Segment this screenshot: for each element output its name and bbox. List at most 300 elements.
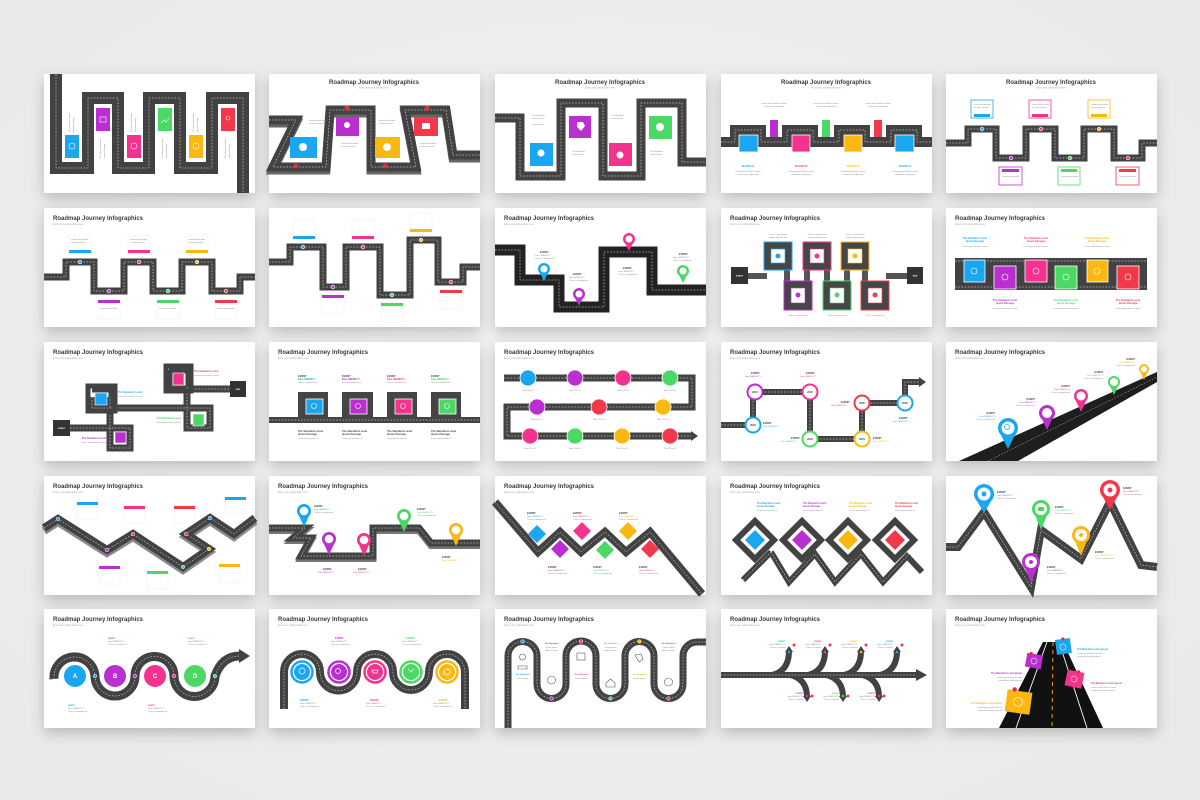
slide 1: vertical serpentine road: The Standard Lorem — [99, 139, 102, 158]
slide 13: three-lane step road with circles: Step Title 04 — [664, 389, 677, 392]
slide 25: perspective road with sticky notes: Lorem ipsum dolor sit amet — [1091, 686, 1116, 689]
slide 3: square wave road with squares: Lorem ipsum — [532, 123, 544, 126]
slide 3: square wave road with squares: Roadmap Journey Infographics — [555, 80, 646, 86]
slide 18: zigzag road with diamonds: EVENT — [593, 565, 602, 569]
slide 17: folded road with pins: EVENT — [358, 567, 367, 571]
slide 22: serpentine road with icon circles: Date: MM/DD/YY — [300, 702, 317, 705]
slide 10: road band with alternating squares: Ipsum Passage — [996, 302, 1015, 305]
slide 22: serpentine road with icon circles: Date: MM/DD/YY — [331, 640, 348, 643]
slide 25: perspective road with sticky notes — [946, 609, 1157, 728]
slide 22: serpentine road with icon circles — [269, 609, 480, 728]
slide 13: three-lane step road with circles: Step Title 03 — [617, 389, 630, 392]
slide 24: arrow road with branches: This is a sample — [788, 699, 804, 701]
slide 10: road band with alternating squares: Lorem ipsum dolor sit amet — [1053, 307, 1079, 310]
slide 5: wave road with phase cards: Enter your subheadline here — [1036, 86, 1067, 90]
slide 10: road band with alternating squares: Ipsum Passage — [1057, 302, 1076, 305]
slide 8: black road with map pins: This is a sample text — [618, 273, 637, 276]
slide 8: black road with map pins: Roadmap Journey Infographics — [504, 216, 595, 222]
slide 4: phase road: consectetur adipiscing — [738, 173, 759, 176]
slide 19: diamond loops: The Standard Lorem — [895, 502, 918, 505]
slide 6: wave road with cards: Lorem ipsum dolor — [100, 307, 118, 310]
slide 22: serpentine road with icon circles: This is a sample text — [433, 705, 452, 708]
slide 11: start to end crossroads: The Standard Lorem — [118, 391, 143, 394]
slide 23: vertical wave road with outline icons: The Standard — [545, 642, 559, 645]
slide 24: arrow road with branches: EVENT — [796, 693, 804, 695]
slide 10: road band with alternating squares: The Standard Lorem — [963, 237, 988, 240]
slide 20: mountain road with pins: This is a sample text — [997, 497, 1016, 500]
slide 8: black road with map pins: Enter your subheadline here — [504, 223, 535, 226]
slide 19: diamond loops: Lorem ipsum dolor sit — [895, 509, 915, 512]
slide 20: mountain road with pins: EVENT — [1047, 565, 1056, 569]
slide 2: 3D zigzag road with pins — [269, 74, 480, 193]
slide 6: wave road with cards: sit amet consect — [130, 241, 145, 244]
slide 8: black road with map pins: Date: MM/DD/YY — [535, 254, 552, 257]
slide 12: straight road with framed squares: This is a sample text — [298, 381, 317, 384]
slide 1: vertical serpentine road: Ipsum Passage — [166, 143, 168, 158]
slide 18: zigzag road with diamonds: This is a sample text — [548, 572, 567, 575]
slide 2: 3D zigzag road with pins: Lorem ipsum dolor — [341, 142, 359, 145]
slide 19: diamond loops: The Standard Lorem — [757, 502, 780, 505]
slide 14: year timeline road: 2020 — [750, 423, 756, 427]
slide 13: three-lane step road with circles: Step Title 02 — [569, 389, 582, 392]
slide 23: vertical wave road with outline icons: Lorem ipsum — [662, 646, 675, 649]
slide 12: straight road with framed squares: Lorem ipsum dolor sit — [387, 437, 407, 440]
slide 10: road band with alternating squares: Ipsum Passage — [966, 240, 985, 243]
slide 22: serpentine road with icon circles: EVENT — [370, 698, 379, 702]
slide 21: wavy road with A B C D circles: D — [193, 674, 198, 680]
slide 3: square wave road with squares: The Standard — [650, 150, 663, 153]
slide 20: mountain road with pins: EVENT — [1095, 550, 1104, 554]
slide 21: wavy road with A B C D circles: Enter your subheadline here — [53, 624, 84, 627]
slide 20: mountain road with pins: Date: MM/DD/YY — [1047, 569, 1064, 572]
slide 6: wave road with cards: Lorem ipsum dolor — [71, 238, 89, 241]
slide 14: year timeline road: Date: MM/DD/YY — [763, 425, 780, 428]
slide 19: diamond loops: Ipsum Passage — [849, 505, 867, 508]
slide 14: year timeline road: 2024 — [859, 437, 865, 441]
slide 11: start to end crossroads: Lorem ipsum dolor sit amet — [194, 374, 219, 377]
slide 13: three-lane step road with circles: Step Title 05 — [657, 418, 670, 421]
slide 13: three-lane step road with circles — [495, 342, 706, 461]
slide 9: start/end with looped squares: Enter your subheadline here — [730, 223, 761, 226]
slide 19: diamond loops: Ipsum Passage — [803, 505, 821, 508]
slide 6: wave road with cards: Lorem ipsum dolor — [188, 238, 206, 241]
slide 11: start to end crossroads: Roadmap Journey Infographics — [53, 350, 144, 356]
slide 3: square wave road with squares: Lorem Ipsum — [650, 153, 662, 156]
slide 23: vertical wave road with outline icons: Enter your subheadline here — [504, 624, 535, 627]
slide 13: three-lane step road with circles: Roadmap Journey Infographics — [504, 350, 595, 356]
slide 24: arrow road with branches: Date: MM/DD/YY — [859, 695, 876, 698]
slide 14: year timeline road: Date: MM/DD/YY — [873, 440, 890, 443]
slide 4: phase road: consectetur adipiscing — [764, 105, 785, 108]
slide 1: vertical serpentine road: Ipsum Passage — [229, 143, 231, 158]
slide 10: road band with alternating squares: Ipsum Passage — [1088, 240, 1107, 243]
slide 22: serpentine road with icon circles: Roadmap Journey Infographics — [278, 617, 369, 623]
slide 4: phase road: Lorem ipsum dolor sit amet — [813, 102, 839, 105]
slide 10: road band with alternating squares: The Standard Lorem — [1054, 299, 1079, 302]
slide 19: diamond loops: Enter your subheadline here — [730, 491, 761, 494]
slide 23: vertical wave road with outline icons: The Standard — [604, 642, 618, 645]
slide 22: serpentine road with icon circles: This is a sample text — [300, 705, 319, 708]
slide 25: perspective road with sticky notes: The Standard Lorem Ipsum — [1091, 682, 1122, 685]
slide 15: diagonal road with growing pins: This is a sample text — [1016, 404, 1035, 407]
slide 15: diagonal road with growing pins: Date: MM/DD/YY — [1054, 388, 1071, 391]
slide 1: vertical serpentine road: Ipsum Passage — [73, 117, 75, 132]
slide 5: wave road with phase cards: Lorem ipsum dolor — [974, 103, 992, 106]
slide 14: year timeline road: 2025 — [859, 401, 865, 405]
slide 9: start/end with looped squares: simply add your text — [846, 236, 865, 239]
slide 20: mountain road with pins: EVENT — [1123, 486, 1132, 490]
slide 19: diamond loops: Lorem ipsum dolor sit — [803, 509, 823, 512]
slide 4: phase road — [721, 74, 932, 193]
slide 14: year timeline road: EVENT — [899, 416, 908, 420]
slide 8: black road with map pins: EVENT — [679, 252, 688, 256]
slide 9: start/end with looped squares: This is a sample text — [789, 314, 808, 317]
slide 14: year timeline road: EVENT — [806, 371, 815, 375]
slide 11: start to end crossroads: The Standard Lorem — [82, 437, 107, 440]
slide 24: arrow road with branches: EVENT — [814, 641, 822, 643]
slide 24: arrow road with branches: Enter your subheadline here — [730, 624, 761, 627]
slide 20: mountain road with pins: Date: MM/DD/YY — [1123, 490, 1140, 493]
slide 5: wave road with phase cards: Roadmap Journey Infographics — [1006, 80, 1097, 86]
slide 14: year timeline road: EVENT — [841, 400, 850, 404]
slide 21: wavy road with A B C D circles: This is a sample text — [108, 643, 127, 646]
slide 11: start to end crossroads: START — [58, 427, 66, 430]
slide 14: year timeline road: Date: MM/DD/YY — [745, 375, 762, 378]
slide 12: straight road with framed squares: Roadmap Journey Infographics — [278, 350, 369, 356]
slide 18: zigzag road with diamonds: This is a sample text — [619, 518, 638, 521]
slide 5: wave road with phase cards: sit amet consect — [1032, 106, 1047, 109]
slide 20: mountain road with pins: Date: MM/DD/YY — [1095, 554, 1112, 557]
slide 14: year timeline road: Roadmap Journey Infographics — [730, 350, 821, 356]
slide 9: start/end with looped squares: simply add your text — [769, 236, 788, 239]
slide 20: mountain road with pins: This is a sample text — [1047, 572, 1066, 575]
slide 9: start/end with looped squares: simply add your text — [808, 236, 827, 239]
slide 19: diamond loops: Roadmap Journey Infographics — [730, 484, 821, 490]
slide 5: wave road with phase cards: Lorem ipsum dolor — [1032, 103, 1050, 106]
slide 23: vertical wave road with outline icons: Lorem ipsum — [633, 677, 646, 680]
slide 12: straight road with framed squares: This is a sample text — [387, 381, 406, 384]
slide 8: black road with map pins: EVENT — [623, 266, 632, 270]
slide 22: serpentine road with icon circles: This is a sample text — [331, 643, 350, 646]
slide 24: arrow road with branches: Roadmap Journey Infographics — [730, 617, 821, 623]
slide 12: straight road with framed squares: The Standard Lorem — [298, 429, 324, 433]
slide 4: phase road: Roadmap Journey Infographics — [781, 80, 872, 86]
slide 21: wavy road with A B C D circles: This is a sample text — [68, 710, 87, 713]
slide 18: zigzag road with diamonds: EVENT — [527, 511, 536, 515]
slide 24: arrow road with branches: Date: MM/DD/YY — [787, 695, 804, 698]
slide 10: road band with alternating squares: The Standard Lorem — [1085, 237, 1110, 240]
slide 10: road band with alternating squares: Lorem ipsum dolor sit amet — [1084, 245, 1110, 248]
slide 21: wavy road with A B C D circles: Date: MM/DD/YY — [68, 707, 85, 710]
slide 6: wave road with cards: Roadmap Journey Infographics — [53, 216, 144, 222]
slide 1: vertical serpentine road: Ipsum Passage — [135, 117, 137, 132]
slide 10: road band with alternating squares: Ipsum Passage — [1119, 302, 1138, 305]
slide 21: wavy road with A B C D circles: This is a sample text — [148, 710, 167, 713]
slide 14: year timeline road: EVENT — [763, 421, 772, 425]
slide 23: vertical wave road with outline icons: dolor sit amet — [604, 649, 617, 652]
slide 9: start/end with looped squares: Roadmap Journey Infographics — [730, 216, 821, 222]
slide 19: diamond loops: Lorem ipsum dolor sit — [849, 509, 869, 512]
slide 14: year timeline road: Date: MM/DD/YY — [800, 375, 817, 378]
slide 24: arrow road with branches: This is a sample — [770, 647, 786, 649]
slide 21: wavy road with A B C D circles: B — [113, 674, 118, 680]
slide 14: year timeline road: EVENT — [791, 436, 800, 440]
slide 12: straight road with framed squares: The Standard Lorem — [431, 429, 457, 433]
slide 9: start/end with looped squares — [721, 208, 932, 327]
slide 21: wavy road with A B C D circles: EVENT — [68, 705, 76, 707]
slide 9: start/end with looped squares: This is a sample text — [828, 314, 847, 317]
slide 25: perspective road with sticky notes: Roadmap Journey Infographics — [955, 617, 1046, 623]
slide 21: wavy road with A B C D circles: C — [153, 674, 158, 680]
slide 11: start to end crossroads: Enter your subheadline here — [53, 357, 84, 360]
slide 22: serpentine road with icon circles: This is a sample text — [402, 643, 421, 646]
slide 1: vertical serpentine road: The Standard Lorem — [224, 139, 227, 158]
slide 24: arrow road with branches: Date: MM/DD/YY — [877, 643, 894, 646]
slide 17: folded road with pins: This is a sample text — [314, 511, 333, 514]
slide 8: black road with map pins: Date: MM/DD/YY — [569, 276, 586, 279]
slide 23: vertical wave road with outline icons: dolor sit amet — [545, 649, 558, 652]
slide 6: wave road with cards: Lorem ipsum dolor — [159, 307, 177, 310]
slide 24: arrow road with branches: EVENT — [850, 641, 858, 643]
slide 25: perspective road with sticky notes: Lorem ipsum dolor sit amet — [977, 706, 1002, 709]
slide 23: vertical wave road with outline icons: The Standard — [516, 673, 530, 676]
slide 4: phase road: consectetur adipiscing — [791, 173, 812, 176]
slide 17: folded road with pins: EVENT — [314, 504, 323, 508]
slide 10: road band with alternating squares: The Standard Lorem — [993, 299, 1018, 302]
slide 22: serpentine road with icon circles: Date: MM/DD/YY — [433, 702, 450, 705]
slide 3: square wave road with squares: Lorem Ipsum — [532, 117, 544, 120]
slide 12: straight road with framed squares: This is a sample text — [431, 381, 450, 384]
slide 18: zigzag road with diamonds: EVENT — [619, 511, 628, 515]
slide 12: straight road with framed squares: Ipsum Passage — [387, 432, 406, 436]
slide 15: diagonal road with growing pins: EVENT — [1126, 357, 1135, 361]
slide 14: year timeline road: 2023 — [807, 437, 813, 441]
slide 12: straight road with framed squares: The Standard Lorem — [387, 429, 413, 433]
slide 24: arrow road with branches: This is a sample — [860, 699, 876, 701]
slide 12: straight road with framed squares: Date: MM/DD/YY — [387, 378, 405, 381]
slide 11: start to end crossroads: Lorem ipsum dolor sit amet — [156, 421, 181, 424]
slide 10: road band with alternating squares: Lorem ipsum dolor sit amet — [962, 245, 988, 248]
slide 2: 3D zigzag road with pins: sit amet consect — [419, 145, 434, 148]
slide 24: arrow road with branches: Date: MM/DD/YY — [769, 643, 786, 646]
slide 17: folded road with pins: This is a sample text — [417, 514, 436, 517]
slide 3: square wave road with squares: The Standard — [611, 114, 624, 117]
slide 13: three-lane step road with circles: Step Title 08 — [664, 447, 677, 450]
slide 21: wavy road with A B C D circles: EVENT — [108, 638, 116, 640]
slide 3: square wave road with squares — [495, 74, 706, 193]
slide 19: diamond loops: Ipsum Passage — [757, 505, 775, 508]
slide 8: black road with map pins: EVENT — [540, 250, 549, 254]
slide 9: start/end with looped squares: START — [736, 274, 744, 278]
slide 4: phase road: PHASE 02 — [795, 164, 808, 168]
slide 24: arrow road with branches: Date: MM/DD/YY — [805, 643, 822, 646]
slide 5: wave road with phase cards: sit amet consect — [974, 106, 989, 109]
slide 13: three-lane step road with circles: Step Title 01 — [522, 389, 535, 392]
slide 25: perspective road with sticky notes: Lorem ipsum dolor sit amet — [1077, 652, 1102, 655]
slide 15: diagonal road with growing pins: EVENT — [1094, 370, 1103, 374]
slide 11: start to end crossroads: Lorem ipsum dolor sit amet — [118, 395, 143, 398]
slide 23: vertical wave road with outline icons: Lorem ipsum — [575, 677, 587, 680]
slide 3: square wave road with squares: Lorem Ipsum — [572, 153, 584, 156]
slide 1: vertical serpentine road: The Standard Lorem — [68, 113, 71, 132]
slide 12: straight road with framed squares: Ipsum Passage — [342, 432, 361, 436]
slide 17: folded road with pins: Date: MM/DD/YY — [314, 508, 331, 511]
slide 4: phase road: Lorem ipsum dolor sit amet — [761, 102, 787, 105]
slide 24: arrow road with branches: This is a sample — [842, 647, 858, 649]
slide 11: start to end crossroads: The Standard Lorem — [157, 417, 182, 420]
slide 13: three-lane step road with circles: Step Title 09 — [616, 447, 629, 450]
slide 18: zigzag road with diamonds: Enter your subheadline here — [504, 491, 535, 494]
slide 10: road band with alternating squares: Lorem ipsum dolor sit amet — [1023, 245, 1049, 248]
slide 19: diamond loops: The Standard Lorem — [849, 502, 872, 505]
slide 10: road band with alternating squares: Roadmap Journey Infographics — [955, 216, 1046, 222]
slide 14: year timeline road: Enter your subheadline here — [730, 357, 761, 360]
slide 24: arrow road with branches: EVENT — [886, 641, 894, 643]
slide 22: serpentine road with icon circles: EVENT — [300, 698, 309, 702]
slide 9: start/end with looped squares: This is a sample text — [808, 233, 827, 236]
slide 24: arrow road with branches: Date: MM/DD/YY — [823, 695, 840, 698]
slide 1: vertical serpentine road: The Standard Lorem — [130, 113, 133, 132]
slide 8: black road with map pins: This is a sample text — [673, 259, 692, 262]
slide 15: diagonal road with growing pins: Roadmap Journey Infographics — [955, 350, 1046, 356]
slide 8: black road with map pins — [495, 208, 706, 327]
slide 25: perspective road with sticky notes: consectetur adipiscing elit — [1077, 655, 1101, 658]
slide 25: perspective road with sticky notes: consectetur adipiscing elit — [978, 709, 1002, 712]
slide 21: wavy road with A B C D circles: Date: MM/DD/YY — [148, 707, 165, 710]
slide 15: diagonal road with growing pins: EVENT — [986, 411, 995, 415]
slide 6: wave road with cards: sit amet consect — [188, 241, 203, 244]
slide 9: start/end with looped squares: This is a sample text — [866, 314, 885, 317]
slide 24: arrow road with branches: This is a sample — [824, 699, 840, 701]
slide 18: zigzag road with diamonds: Date: MM/DD/YY — [639, 569, 656, 572]
slide 21: wavy road with A B C D circles: Date: MM/DD/YY — [188, 640, 205, 643]
slide 18: zigzag road with diamonds: Roadmap Journey Infographics — [504, 484, 595, 490]
slide 4: phase road: PHASE 04 — [899, 164, 912, 168]
slide 17: folded road with pins: Date: MM/DD/YY — [442, 559, 459, 562]
slide 12: straight road with framed squares: EVENT — [298, 374, 307, 378]
slide 13: three-lane step road with circles: Enter your subheadline here — [504, 357, 535, 360]
slide 14: year timeline road: 2021 — [752, 390, 758, 394]
slide 22: serpentine road with icon circles: Date: MM/DD/YY — [402, 640, 419, 643]
slide 15: diagonal road with growing pins: Date: MM/DD/YY — [1119, 361, 1136, 364]
slide 4: phase road: consectetur adipiscing — [868, 105, 889, 108]
slide 22: serpentine road with icon circles: EVENT — [335, 636, 344, 640]
slide 10: road band with alternating squares: Lorem ipsum dolor sit amet — [1115, 307, 1141, 310]
slide 23: vertical wave road with outline icons: The Standard — [662, 642, 676, 645]
slide 20: mountain road with pins: EVENT — [997, 490, 1006, 494]
slide 1: vertical serpentine road — [44, 74, 255, 193]
slide 23: vertical wave road with outline icons: dolor sit amet — [662, 649, 675, 652]
slide 23: vertical wave road with outline icons: The Standard — [633, 673, 647, 676]
slide 12: straight road with framed squares: EVENT — [431, 374, 440, 378]
slide 24: arrow road with branches — [721, 609, 932, 728]
slide 1: vertical serpentine road: The Standard Lorem — [192, 113, 195, 132]
slide 18: zigzag road with diamonds: EVENT — [548, 565, 557, 569]
slide 24: arrow road with branches: EVENT — [778, 641, 786, 643]
slide 22: serpentine road with icon circles: Enter your subheadline here — [278, 624, 309, 627]
slide 2: 3D zigzag road with pins: Lorem ipsum dolor — [419, 142, 437, 145]
slide 18: zigzag road with diamonds: Date: MM/DD/YY — [619, 515, 636, 518]
slide 20: mountain road with pins: Date: MM/DD/YY — [1055, 509, 1072, 512]
slide 16: 3D zigzag road with phase cards: Enter your subheadline here — [53, 491, 84, 494]
slide 20: mountain road with pins: This is a sample text — [1123, 493, 1142, 496]
slide 4: phase road: Lorem ipsum dolor sit amet — [735, 170, 761, 173]
slide 3: square wave road with squares: The Standard — [532, 114, 545, 117]
slide 20: mountain road with pins: EVENT — [1055, 505, 1064, 509]
slide 21: wavy road with A B C D circles: Roadmap Journey Infographics — [53, 617, 144, 623]
slide 5: wave road with phase cards: sit amet consect — [1091, 106, 1106, 109]
slide 15: diagonal road with growing pins: Date: MM/DD/YY — [1019, 401, 1036, 404]
slide 20: mountain road with pins — [946, 476, 1157, 595]
slide 18: zigzag road with diamonds: Date: MM/DD/YY — [527, 515, 544, 518]
slide 14: year timeline road: EVENT — [751, 371, 760, 375]
slide 23: vertical wave road with outline icons: Lorem ipsum — [516, 677, 529, 680]
slide 2: 3D zigzag road with pins: Lorem ipsum dolor — [309, 119, 327, 122]
slide 4: phase road: PHASE 03 — [847, 164, 860, 168]
slide 23: vertical wave road with outline icons: The Standard — [574, 673, 589, 676]
slide 2: 3D zigzag road with pins: Lorem ipsum dolor — [378, 119, 396, 122]
slide 10: road band with alternating squares: The Standard Lorem — [1024, 237, 1049, 240]
slide 13: three-lane step road with circles: Step Title 07 — [531, 418, 544, 421]
slide 23: vertical wave road with outline icons: Roadmap Journey Infographics — [504, 617, 595, 623]
slide 9: start/end with looped squares: This is a sample text — [769, 233, 788, 236]
slide 25: perspective road with sticky notes: The Standard Lorem Ipsum — [971, 702, 1002, 705]
slide 16: 3D zigzag road with phase cards: Roadmap Journey Infographics — [53, 484, 144, 490]
slide 20: mountain road with pins: This is a sample text — [1055, 512, 1074, 515]
slide 4: phase road: Lorem ipsum dolor sit amet — [892, 170, 918, 173]
slide 25: perspective road with sticky notes: consectetur adipiscing elit — [1091, 689, 1115, 692]
slide 22: serpentine road with icon circles: Date: MM/DD/YY — [366, 702, 383, 705]
slide 25: perspective road with sticky notes: Enter your subheadline here — [955, 624, 986, 627]
slide 18: zigzag road with diamonds: This is a sample text — [593, 572, 612, 575]
slide 12: straight road with framed squares: This is a sample text — [342, 381, 361, 384]
slide 24: arrow road with branches: Date: MM/DD/YY — [841, 643, 858, 646]
slide 17: folded road with pins: EVENT — [442, 555, 451, 559]
slide 25: perspective road with sticky notes: Lorem ipsum dolor sit amet — [997, 676, 1022, 679]
slide 17: folded road with pins: EVENT — [323, 567, 332, 571]
slide 23: vertical wave road with outline icons — [495, 609, 706, 728]
slide 13: three-lane step road with circles: Step Title 06 — [593, 418, 606, 421]
slide 6: wave road with cards: Lorem ipsum dolor — [130, 238, 148, 241]
slide 20: mountain road with pins: Date: MM/DD/YY — [997, 494, 1014, 497]
slide 14: year timeline road: Date: MM/DD/YY — [831, 404, 848, 407]
slide 14: year timeline road: EVENT — [873, 436, 882, 440]
slide 12: straight road with framed squares: Lorem ipsum dolor sit — [298, 437, 318, 440]
slide 17: folded road with pins: EVENT — [417, 507, 426, 511]
slide 15: diagonal road with growing pins: Date: MM/DD/YY — [979, 415, 996, 418]
slide 8: black road with map pins: Date: MM/DD/YY — [618, 270, 635, 273]
slide 18: zigzag road with diamonds: This is a sample text — [527, 518, 546, 521]
slide 17: folded road with pins — [269, 476, 480, 595]
slide 10: road band with alternating squares: The Standard Lorem — [1116, 299, 1141, 302]
slide 19: diamond loops: Ipsum Passage — [895, 505, 913, 508]
slide 24: arrow road with branches: EVENT — [868, 693, 876, 695]
slide 18: zigzag road with diamonds: This is a sample text — [639, 572, 658, 575]
slide 12: straight road with framed squares: Ipsum Passage — [298, 432, 317, 436]
slide 10: road band with alternating squares: Enter your subheadline here — [955, 223, 986, 226]
slide 14: year timeline road: Date: MM/DD/YY — [781, 440, 798, 443]
slide 21: wavy road with A B C D circles — [44, 609, 255, 728]
slide 19: diamond loops: Lorem ipsum dolor sit — [757, 509, 777, 512]
slide 4: phase road: consectetur adipiscing — [816, 105, 837, 108]
slide 21: wavy road with A B C D circles: EVENT — [148, 705, 156, 707]
slide 19: diamond loops: The Standard Lorem — [803, 502, 826, 505]
slide 12: straight road with framed squares — [269, 342, 480, 461]
slide 12: straight road with framed squares: Lorem ipsum dolor sit — [342, 437, 362, 440]
slide 12: straight road with framed squares: EVENT — [342, 374, 351, 378]
slide 17: folded road with pins: Date: MM/DD/YY — [353, 571, 370, 574]
slide 15: diagonal road with growing pins: This is a sample text — [976, 418, 995, 421]
